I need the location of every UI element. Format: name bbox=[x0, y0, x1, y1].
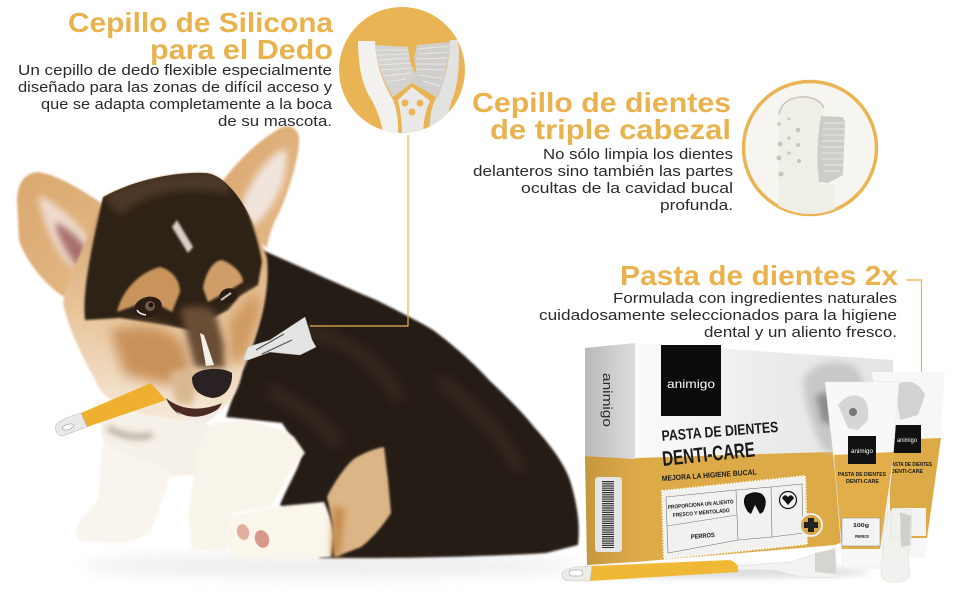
product: front tube: PASTA DE DIENTES bbox=[838, 472, 886, 478]
text block: cepillo de silicona: que se adapta completamente a la boca bbox=[41, 97, 333, 113]
product: finger brush bbox=[881, 508, 912, 582]
product: box: PERROS bbox=[691, 532, 716, 541]
chest bbox=[96, 400, 214, 476]
product: back tube: animigo bbox=[897, 438, 918, 444]
muzzle and bridge bbox=[110, 326, 192, 385]
heading: triple cabezal: de triple cabezal bbox=[490, 114, 731, 145]
brush in mouth bbox=[81, 383, 166, 427]
box front white bbox=[635, 343, 893, 458]
product: front tube: 100g bbox=[853, 523, 869, 529]
text block: triple cabezal: ocultas de la cavidad bucal bbox=[521, 181, 733, 197]
mouth bbox=[166, 398, 222, 419]
product: box bbox=[570, 343, 893, 578]
logo black bbox=[661, 345, 721, 416]
dog body bbox=[226, 250, 579, 558]
dog photo bbox=[803, 362, 862, 452]
text block: cepillo de silicona bbox=[18, 63, 333, 130]
white label bbox=[662, 476, 807, 559]
product: front tube: animigo bbox=[851, 449, 874, 455]
text block: triple cabezal: delanteros sino también las partes bbox=[473, 164, 733, 180]
face bbox=[63, 173, 268, 423]
right ear bbox=[214, 126, 299, 248]
spine logo: animigo bbox=[600, 373, 615, 427]
product: box: animigo bbox=[667, 377, 715, 391]
box shadow bbox=[570, 566, 870, 578]
heading: triple cabezal: Cepillo de dientes bbox=[472, 87, 731, 118]
text block: cepillo de silicona: de su mascota. bbox=[218, 114, 332, 130]
right front leg bbox=[188, 420, 305, 550]
text block: pasta de dientes: dental y un aliento fresco. bbox=[704, 325, 897, 341]
heart icon bbox=[780, 492, 796, 508]
left front leg bbox=[76, 445, 170, 543]
text block: cepillo de silicona: Un cepillo de dedo flexible especialmente bbox=[18, 63, 332, 79]
eyes bbox=[132, 285, 239, 320]
heading: cepillo de silicona: Cepillo de Silicona bbox=[68, 7, 333, 38]
floor shadow bbox=[80, 557, 580, 575]
forehead blaze bbox=[172, 220, 193, 253]
brows bbox=[117, 267, 180, 312]
product: box: DENTI-CARE bbox=[661, 438, 756, 471]
connector line: brush to circle bbox=[310, 135, 408, 326]
tooth icon bbox=[744, 492, 766, 514]
connector line: pasta bbox=[906, 280, 922, 372]
heading: cepillo de silicona bbox=[68, 7, 333, 65]
product: front tube: DENTI-CARE bbox=[846, 479, 879, 485]
hind paw bbox=[226, 502, 333, 560]
nose blaze bbox=[200, 333, 214, 366]
head markings bbox=[84, 170, 262, 330]
nose bbox=[192, 369, 232, 398]
text block: triple cabezal: profunda. bbox=[660, 198, 733, 214]
product: back tube: DENTI-CARE bbox=[891, 469, 923, 475]
box spine bbox=[585, 343, 635, 459]
icon: triple head brush circle bbox=[339, 7, 465, 137]
icon: finger brush circle bbox=[744, 82, 876, 220]
product: bottom toothbrush bbox=[562, 548, 837, 581]
product: box: PROPORCIONA UN ALIENTO bbox=[668, 499, 735, 511]
product: front tube: PERROS bbox=[855, 534, 869, 539]
illustration: puppy bbox=[17, 126, 580, 575]
product: front tube bbox=[825, 382, 899, 568]
text block: pasta de dientes: cuidadosamente seleccionados para la higiene bbox=[539, 308, 897, 324]
heading: cepillo de silicona: para el Dedo bbox=[150, 34, 333, 65]
product: back tube bbox=[872, 372, 945, 558]
box front gold bbox=[635, 450, 893, 562]
text block: cepillo de silicona: diseñado para las zonas de difícil acceso y bbox=[18, 80, 333, 96]
text block: triple cabezal bbox=[473, 147, 733, 214]
left ear bbox=[17, 172, 111, 297]
product: box: MEJORA LA HIGIENE BUCAL bbox=[662, 467, 757, 483]
heading: triple cabezal bbox=[472, 87, 731, 145]
barcode bbox=[595, 477, 622, 552]
fur highlights bbox=[270, 330, 520, 470]
heading: pasta de dientes: Pasta de dientes 2x bbox=[620, 260, 898, 291]
product: box: FRESCO Y MENTOLADO bbox=[673, 508, 731, 519]
text block: pasta de dientes: Formulada con ingredientes naturales bbox=[613, 291, 897, 307]
text block: pasta de dientes bbox=[539, 291, 897, 341]
seal bbox=[800, 514, 822, 536]
product: back tube: PASTA DE DIENTES bbox=[889, 462, 932, 468]
thigh tan patch bbox=[327, 447, 391, 557]
text block: triple cabezal: No sólo limpia los dientes bbox=[543, 147, 733, 163]
box title: PASTA DE DIENTES bbox=[661, 419, 779, 445]
